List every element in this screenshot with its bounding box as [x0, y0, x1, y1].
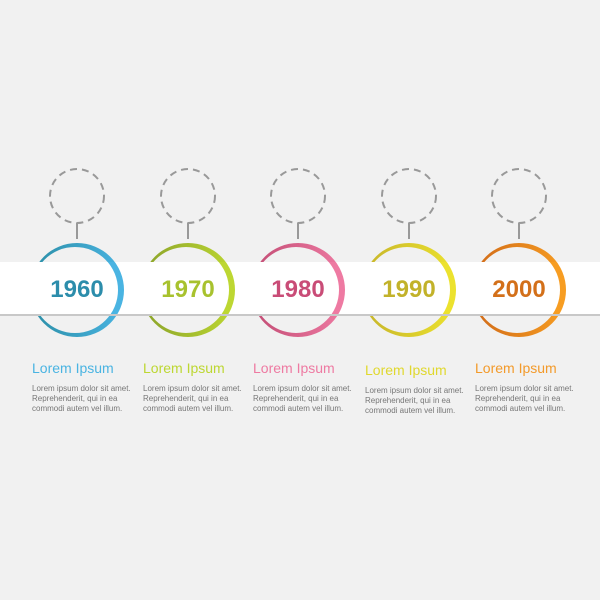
- text block: 1980: commodi autem vel illum.: [253, 404, 343, 413]
- item: 1970: [141, 169, 235, 337]
- years: 1980: [271, 276, 325, 303]
- text block: 1990: Reprehenderit, qui in ea: [365, 396, 451, 405]
- years: 1990: [382, 276, 436, 303]
- timeline band: [0, 262, 600, 316]
- connector: [518, 223, 520, 239]
- years: 1960: [50, 276, 104, 303]
- icon: dashed circle: [271, 169, 325, 223]
- text block: 1960: Reprehenderit, qui in ea: [32, 394, 118, 403]
- ring: [251, 243, 345, 337]
- text block: 1960: commodi autem vel illum.: [32, 404, 122, 413]
- text block: 1960: [32, 360, 131, 413]
- text block: 1990: commodi autem vel illum.: [365, 406, 455, 415]
- text block: 1960: Lorem Ipsum: [32, 360, 114, 376]
- text block: 1970: commodi autem vel illum.: [143, 404, 233, 413]
- ring fronts over band: [108, 262, 566, 314]
- text block: 2000: Lorem ipsum dolor sit amet.: [475, 384, 574, 393]
- icon: dashed circle: [161, 169, 215, 223]
- icon: dashed circle: [492, 169, 546, 223]
- icon: dashed circle: [382, 169, 436, 223]
- text block: 2000: commodi autem vel illum.: [475, 404, 565, 413]
- text block: 1980: Lorem ipsum dolor sit amet.: [253, 384, 352, 393]
- text block: 1980: Reprehenderit, qui in ea: [253, 394, 339, 403]
- years: 1970: [161, 276, 215, 303]
- connector: [76, 223, 78, 239]
- icon: dashed circle: [50, 169, 104, 223]
- text block: 1970: Lorem Ipsum: [143, 360, 225, 376]
- text block: 1980: [253, 360, 352, 413]
- item: 1980: [251, 169, 345, 337]
- text block: 1970: Lorem ipsum dolor sit amet.: [143, 384, 242, 393]
- text block: 1970: Reprehenderit, qui in ea: [143, 394, 229, 403]
- ring: [141, 243, 235, 337]
- ring: [472, 243, 566, 337]
- connector: [187, 223, 189, 239]
- text block: 2000: Lorem Ipsum: [475, 360, 557, 376]
- ring: [30, 243, 124, 337]
- text block: 1990: Lorem ipsum dolor sit amet.: [365, 386, 464, 395]
- text block: 1980: Lorem Ipsum: [253, 360, 335, 376]
- item: 2000: [472, 169, 566, 337]
- text block: 2000: Reprehenderit, qui in ea: [475, 394, 561, 403]
- text block: 1960: Lorem ipsum dolor sit amet.: [32, 384, 131, 393]
- text block: 1970: [143, 360, 242, 413]
- text block: 1990: [365, 362, 464, 415]
- item: 1960: [30, 169, 124, 337]
- item: 1990: [362, 169, 456, 337]
- text block: 2000: [475, 360, 574, 413]
- connector: [297, 223, 299, 239]
- text block: 1990: Lorem Ipsum: [365, 362, 447, 378]
- connector: [408, 223, 410, 239]
- years: [50, 276, 546, 303]
- ring: [362, 243, 456, 337]
- years: 2000: [492, 276, 546, 303]
